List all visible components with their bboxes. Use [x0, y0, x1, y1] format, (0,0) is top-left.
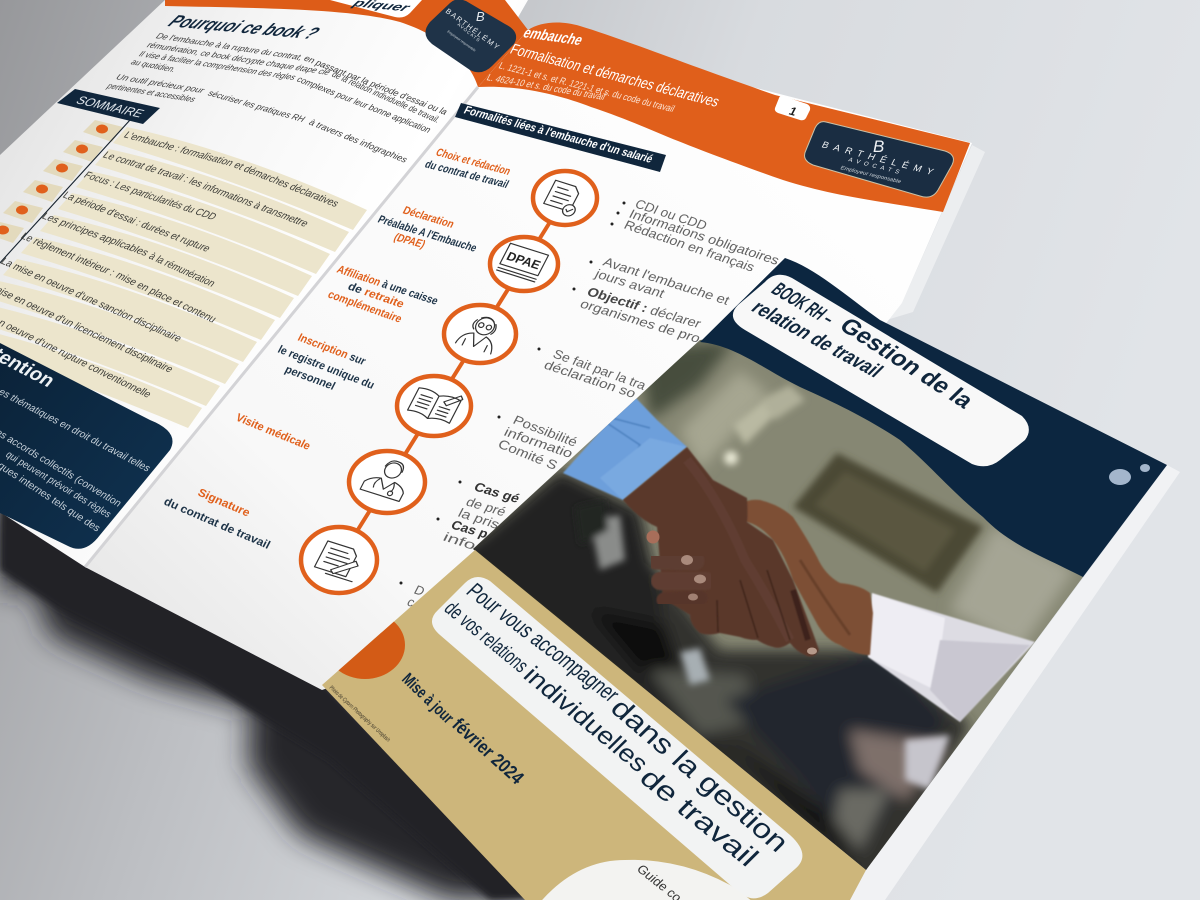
step 4 bullets: informatio [502, 424, 576, 461]
white shirt sleeve [868, 593, 1035, 722]
step 6 label: du contrat de travail [162, 496, 272, 552]
right page logo [805, 122, 953, 197]
step 3 bullets: déclaration so [542, 357, 639, 401]
intro paragraph: De l'embauche à la rupture du contrat, [153, 32, 305, 62]
step 6 circle icon: signed document [301, 527, 377, 593]
step 1 label: Choix et rédaction [434, 147, 512, 178]
step 1 bullets: CDI ou CDD [633, 196, 710, 233]
heading: SOMMAIRE: SOMMAIRE [73, 94, 147, 120]
intro paragraph: en passant par la période d'essai ou la [301, 54, 450, 117]
step 5 bullets [436, 479, 523, 553]
book gutter [85, 87, 478, 567]
summary items: mise en place et contenu [113, 270, 218, 325]
step 5 bullets: Cas gé [472, 479, 523, 506]
intro paragraph: rémunération, ce book décrypte chaque étape clé [144, 41, 333, 77]
summary items: et démarches déclaratives [231, 160, 342, 210]
step 3 label: de retraite [346, 281, 406, 311]
step 3: pension affiliation [326, 264, 649, 401]
cover subtitle pill: dans la gestion [605, 692, 795, 858]
step 6 bullets: D [412, 582, 427, 598]
step 5 label: Visite médicale [234, 412, 312, 453]
step 4 label: le registre unique du [276, 344, 376, 392]
summary timeline line [0, 120, 130, 265]
update date: février 2024 [447, 715, 528, 789]
blue shirt sleeve [563, 395, 687, 500]
step 4 bullets [496, 412, 580, 473]
cover photo: handshake [473, 340, 1084, 870]
cover subtitle pill [432, 577, 802, 898]
left page logo [425, 0, 516, 72]
step 3 bullets [538, 346, 649, 401]
step 2 bullets: organismes de pro [578, 296, 703, 346]
intro paragraph: à travers des infographies [306, 118, 410, 165]
left page logo: Employeur responsable [446, 30, 476, 52]
header legal references: L. 1221-1 et s. et R. 1221-1 et s. du code du travail [497, 61, 676, 115]
step 4 circle icon: open register [397, 376, 471, 436]
step 6 bullets [400, 582, 427, 610]
step 5 bullets: info [441, 529, 479, 553]
intro paragraph: de la relation individuelle de travail. [329, 70, 442, 125]
fingertips [646, 530, 817, 654]
blurred details [575, 385, 983, 790]
cover subtitle pill: Pour vous accompagner [461, 578, 625, 707]
intro paragraph: pertinentes et accessibles [104, 82, 198, 104]
step 1 label [423, 147, 512, 191]
heading: SOMMAIRE [57, 89, 160, 124]
step 2: DPAE [376, 205, 733, 346]
left page header tab [330, 0, 422, 18]
summary items: L'embauche : formalisation [121, 130, 236, 168]
step 4 bullets: Comité S [496, 436, 561, 473]
right page of the open book [85, 23, 985, 690]
step 2 bullets [572, 254, 733, 346]
summary items: à la rémunération [146, 251, 217, 289]
header title: L'embauche: embauche [520, 25, 585, 49]
step 4 label: personnel [283, 364, 337, 393]
blurred office background [440, 340, 1075, 890]
summary list bands [0, 127, 367, 428]
right page orange header [478, 23, 970, 212]
cover decorative dots [1109, 464, 1150, 485]
left page of the open book [0, 0, 528, 567]
step 2 label [376, 205, 479, 255]
step 3 bullets: Se fait par la tra [551, 346, 649, 393]
step 6 label: Signature [196, 487, 252, 519]
step 5 circle icon: doctor [349, 451, 425, 513]
lighter hand [731, 500, 873, 655]
step 1: contract drafting [423, 147, 783, 275]
left page orange header [165, 0, 528, 87]
intro paragraph: Il vise à faciliter la compréhension des règles [136, 50, 298, 82]
cover subtitle pill: de travail [634, 762, 765, 872]
summary items: La période d'essai : durées et rupture [60, 190, 213, 254]
intro paragraph: au quotidien. [128, 58, 178, 74]
step 3 label: Affiliation à une caisse [335, 264, 440, 308]
summary items [0, 130, 342, 400]
summary items: La mise en oeuvre d'une sanction disciplinaire [0, 256, 184, 344]
left page logo: AVOCATS [456, 22, 481, 43]
step 2 circle icon: DPAE screen [490, 237, 558, 291]
step 1 circle icon: document with check [533, 171, 597, 225]
shadow under the book [0, 505, 540, 900]
summary tabs with orange bullets [0, 120, 123, 243]
step 1 bullets: Informations obligatoires [627, 206, 783, 268]
fingers [656, 560, 706, 600]
step 5 bullets: de pré [464, 494, 509, 519]
title: Pourquoi ce book: Pourquoi ce book ? [164, 12, 324, 43]
cover bottom white blob [542, 860, 750, 900]
left page logo: BARTHÉLÉMY [444, 7, 501, 51]
header legal references [485, 61, 676, 115]
cover title pill: relation de travail [746, 297, 887, 381]
step 4 label: Inscription sur [296, 332, 368, 368]
section heading bar: Formalités liées à l'embauche d'un salarié [462, 103, 656, 166]
cover orange blob [338, 622, 405, 679]
step 2 label: Déclaration [401, 205, 456, 231]
update date: Mise à jour [398, 669, 458, 727]
step 2 label: (DPAE) [392, 232, 427, 251]
intro paragraph [104, 32, 450, 165]
step 2 circle icon: DPAE screen: DPAE [504, 249, 543, 272]
intro paragraph: complexes pour leur bonne application [294, 75, 433, 135]
step 2 bullets: jours avant [592, 266, 668, 301]
cover navy header band [700, 258, 1167, 577]
panel: Attention: qui peuvent prévoir des règles [3, 449, 114, 520]
page number tab: 1 [787, 104, 800, 119]
summary items: Le contrat de travail : [100, 150, 191, 184]
step 5: medical visit [234, 412, 523, 553]
update date [398, 669, 528, 789]
step 6: contract signature [162, 487, 427, 610]
darker hand [623, 447, 819, 657]
step 5 bullets: la pris [456, 505, 503, 532]
photo credit: Photo de Cytonn Photography sur Unsplash [328, 685, 391, 743]
summary items: Focus : Les particularités du CDD [81, 170, 219, 222]
timeline connectors [339, 198, 565, 560]
step 3 label [326, 264, 440, 325]
summary items: Les principes applicables [39, 211, 151, 259]
cover title pill: BOOK RH – [766, 279, 840, 329]
page number tab [775, 96, 810, 120]
step 2 bullets: Avant l'embauche et [601, 254, 733, 308]
step 5 bullets: Cas p [449, 517, 491, 541]
cover title pill [733, 275, 1029, 466]
cover tan footer [322, 550, 866, 900]
step 3 label: complémentaire [326, 289, 404, 325]
step 3 circle icon: retired person [444, 305, 516, 363]
intro paragraph: sécuriser les pratiques RH [205, 89, 307, 124]
step 4 bullets: Possibilité [511, 412, 580, 450]
left page logo: B [476, 9, 485, 24]
step 1 bullets: Rédaction en français [622, 217, 758, 275]
right page logo: BARTHÉLÉMY [820, 140, 936, 178]
front cover [322, 250, 1180, 900]
summary items: Le règlement intérieur : [18, 231, 117, 278]
cover subtitle pill: de vos relations [439, 597, 533, 677]
step 2 bullets: Objectif : déclarer [585, 284, 705, 331]
header legal references: L. 4624-10 et s. du code du travail [485, 73, 607, 103]
step 1 bullets [610, 196, 783, 275]
cover subtitle pill: individuelles [518, 662, 654, 778]
cover title pill: Gestion de la [834, 313, 980, 414]
step 1 label: du contrat de travail [423, 159, 511, 191]
intro paragraph: Un outil précieux pour [113, 73, 207, 95]
panel: Attention [0, 335, 172, 549]
header subtitle: Formalisation et démarches déclaratives [507, 41, 722, 111]
right page logo: AVOCATS [847, 157, 900, 176]
step 6 bullets: c [405, 594, 418, 610]
step 4: personnel register [276, 332, 580, 473]
cover page edge [850, 465, 1180, 900]
right page logo: Employeur responsable [839, 165, 902, 185]
right page logo: B [873, 137, 884, 156]
step 2 label: Préalable A l'Embauche [376, 214, 479, 255]
summary items: les informations à transmettre [186, 176, 311, 229]
